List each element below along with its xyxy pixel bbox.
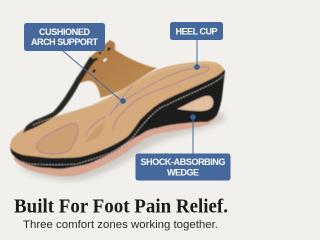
thong strap bbox=[23, 57, 96, 133]
callout: cushioned arch support bbox=[24, 23, 105, 51]
title: Built For Foot Pain Relief. bbox=[14, 196, 228, 218]
shadow bbox=[18, 112, 226, 180]
insole stitching bbox=[33, 63, 216, 125]
black midsole and wedge bbox=[10, 70, 225, 169]
callout: shock-absorbing wedge: WEDGE bbox=[167, 168, 199, 178]
illustration: sandal bbox=[10, 40, 226, 180]
toe strap ornament bbox=[37, 117, 43, 123]
stitching bbox=[13, 75, 223, 165]
gap between strap and upper bbox=[65, 82, 100, 110]
callout: heel cup bbox=[170, 22, 223, 40]
insole bbox=[10, 61, 224, 158]
purple contour lines bbox=[85, 67, 209, 137]
wedge cut-out bbox=[177, 96, 213, 111]
callout: shock-absorbing wedge: SHOCK-ABSORBING bbox=[140, 157, 226, 167]
arch pad bbox=[86, 122, 105, 142]
callout: shock-absorbing wedge bbox=[136, 154, 230, 180]
strap perforations bbox=[89, 47, 111, 73]
subtitle: Three comfort zones working together. bbox=[23, 219, 218, 231]
callout: cushioned arch support: ARCH SUPPORT bbox=[31, 37, 98, 47]
infographic canvas bbox=[9, 22, 230, 231]
strap light holes bbox=[103, 58, 107, 62]
leader line: heel bbox=[194, 40, 200, 70]
callout: cushioned arch support: CUSHIONED bbox=[39, 27, 90, 37]
leader line: arch bbox=[63, 51, 126, 104]
upper brown heel wall and flap bbox=[80, 40, 157, 98]
forefoot pad bbox=[37, 123, 78, 154]
leader line: wedge bbox=[190, 114, 196, 154]
callout: heel cup: HEEL CUP bbox=[176, 26, 218, 36]
outsole bbox=[13, 113, 218, 176]
